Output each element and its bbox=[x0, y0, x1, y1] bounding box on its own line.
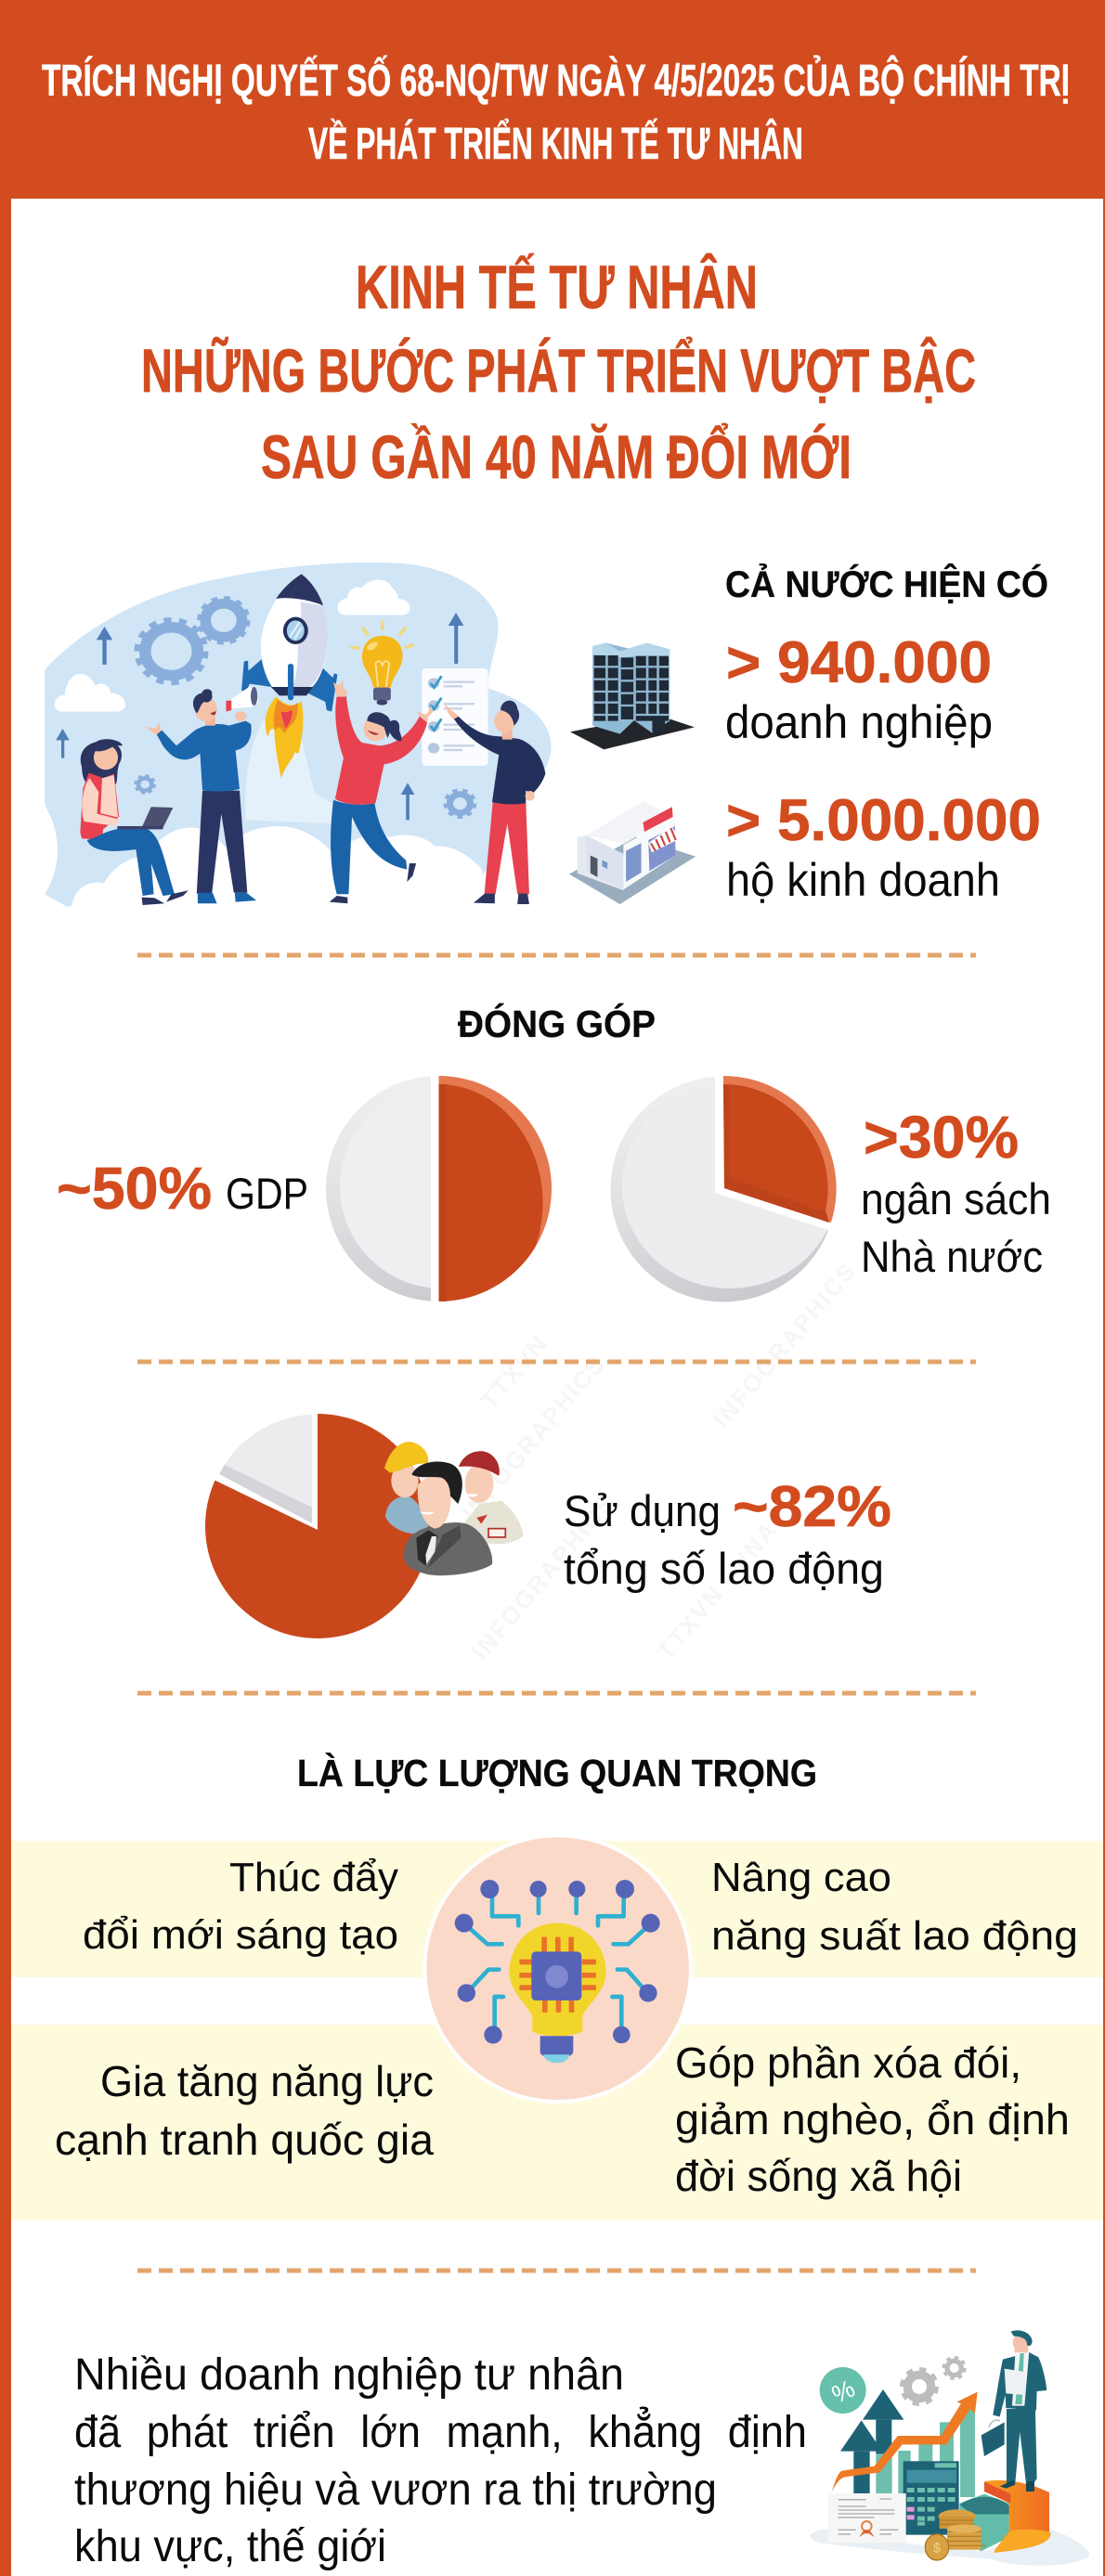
pie chart: 50 percent GDP bbox=[326, 1076, 552, 1322]
page frame: left border bbox=[0, 199, 11, 2576]
arrows bbox=[56, 613, 463, 820]
text: drive innovation bbox=[83, 1855, 398, 1958]
stat: state budget share: ngân sách bbox=[861, 1174, 1051, 1223]
background blob bbox=[45, 563, 552, 907]
text: closing paragraph: khu vực, thế giới bbox=[74, 2522, 386, 2571]
gears bbox=[136, 599, 474, 817]
panel: yellow band bottom bbox=[11, 2025, 1103, 2220]
text: national competitiveness bbox=[55, 2057, 434, 2164]
person: seated woman with laptop bbox=[80, 739, 188, 905]
statistics block: heading: CẢ NƯỚC HIỆN CÓ bbox=[725, 563, 1048, 605]
text: drive innovation: đổi mới sáng tạo bbox=[83, 1912, 398, 1958]
text: drive innovation: Thúc đẩy bbox=[229, 1855, 398, 1900]
watermarks: TTXVN Infographics: TTXVN bbox=[475, 1329, 553, 1415]
stat: number of enterprises bbox=[725, 630, 993, 748]
watermarks: TTXVN Infographics: TTXVN - VNA bbox=[652, 1516, 784, 1665]
stat: GDP share bbox=[57, 1155, 308, 1222]
stat: number of household businesses: > 5.000.000 bbox=[726, 788, 1041, 853]
text: poverty reduction bbox=[675, 2039, 1070, 2200]
person: cheering woman bbox=[330, 680, 433, 903]
stat: state budget share: Nhà nước bbox=[861, 1232, 1043, 1281]
icon: businessman and growth chart: % bbox=[827, 2375, 859, 2409]
heading: important force: LÀ LỰC LƯỢNG QUAN TRỌNG bbox=[297, 1752, 817, 1794]
pie chart: 30 percent state budget bbox=[611, 1076, 838, 1301]
foreground clouds bbox=[67, 826, 486, 910]
text: raise productivity bbox=[711, 1855, 1078, 1959]
illustration: startup team and rocket bbox=[45, 563, 552, 910]
stat: GDP share: ~50% bbox=[57, 1155, 212, 1222]
stat: number of household businesses: hộ kinh doanh bbox=[726, 854, 1000, 906]
watermarks: TTXVN Infographics: INFOGRAPHICS bbox=[457, 1349, 611, 1526]
text: closing paragraph: thương hiệu và vươn ra thị trường bbox=[74, 2466, 717, 2515]
stat: state budget share bbox=[861, 1104, 1051, 1281]
panel: yellow band top bbox=[11, 1841, 1103, 1977]
text: poverty reduction: Góp phần xóa đói, bbox=[675, 2039, 1021, 2087]
pie chart: 82 percent labour bbox=[205, 1411, 430, 1638]
main title: KINH TẾ TƯ NHÂN bbox=[356, 252, 758, 321]
stat: share of labour bbox=[564, 1475, 891, 1593]
small clouds bbox=[55, 579, 410, 712]
stat: share of labour: Sử dụng bbox=[564, 1486, 721, 1535]
header band bbox=[0, 0, 1105, 199]
rocket plume bbox=[245, 715, 384, 826]
text: raise productivity: năng suất lao động bbox=[711, 1913, 1078, 1959]
watermarks: TTXVN Infographics bbox=[457, 1256, 862, 1665]
text: national competitiveness: Gia tăng năng lực bbox=[100, 2057, 434, 2105]
heading: contribution: ĐÓNG GÓP bbox=[458, 1003, 656, 1045]
stat: number of household businesses bbox=[726, 788, 1041, 906]
icon: store bbox=[569, 801, 696, 904]
text: closing paragraph: Nhiều doanh nghiệp tư nhân bbox=[74, 2350, 624, 2400]
icon: businessman and growth chart bbox=[810, 2330, 1089, 2566]
icon: office building bbox=[570, 643, 695, 749]
text: national competitiveness: cạnh tranh quốc gia bbox=[55, 2116, 434, 2164]
main title bbox=[141, 252, 976, 491]
stat: number of enterprises: > 940.000 bbox=[726, 630, 992, 695]
text: poverty reduction: đời sống xã hội bbox=[675, 2152, 962, 2200]
stat: share of labour: tổng số lao động bbox=[564, 1544, 884, 1593]
stat: number of enterprises: doanh nghiệp bbox=[725, 696, 993, 748]
text: closing paragraph bbox=[74, 2350, 807, 2571]
page frame: right border bbox=[1103, 199, 1105, 2576]
icon: businessman and growth chart: $ bbox=[933, 2541, 941, 2556]
text: closing paragraph: đã phát triển lớn mạnh, khẳng định bbox=[74, 2406, 807, 2457]
rocket bbox=[241, 574, 337, 778]
text: raise productivity: Nâng cao bbox=[711, 1855, 891, 1900]
stat: share of labour: ~82% bbox=[733, 1475, 891, 1539]
icon: AI light bulb in circle bbox=[422, 1833, 693, 2104]
watermarks: TTXVN Infographics: INFOGRAPHICS bbox=[708, 1256, 862, 1433]
checklist bbox=[422, 668, 488, 766]
main title: SAU GẦN 40 NĂM ĐỔI MỚI bbox=[261, 422, 852, 491]
person: pointing man bbox=[444, 701, 545, 904]
light bulb bbox=[352, 622, 413, 705]
watermarks: TTXVN Infographics: INFOGRAPHICS bbox=[466, 1488, 620, 1665]
text: poverty reduction: giảm nghèo, ổn định bbox=[675, 2095, 1070, 2143]
person: man with megaphone bbox=[145, 687, 258, 903]
stat: GDP share: GDP bbox=[226, 1169, 308, 1218]
stat: state budget share: >30% bbox=[864, 1104, 1019, 1171]
header text line 2: VỀ PHÁT TRIỂN KINH TẾ TƯ NHÂN bbox=[308, 118, 803, 169]
icon: workers group bbox=[384, 1442, 523, 1575]
